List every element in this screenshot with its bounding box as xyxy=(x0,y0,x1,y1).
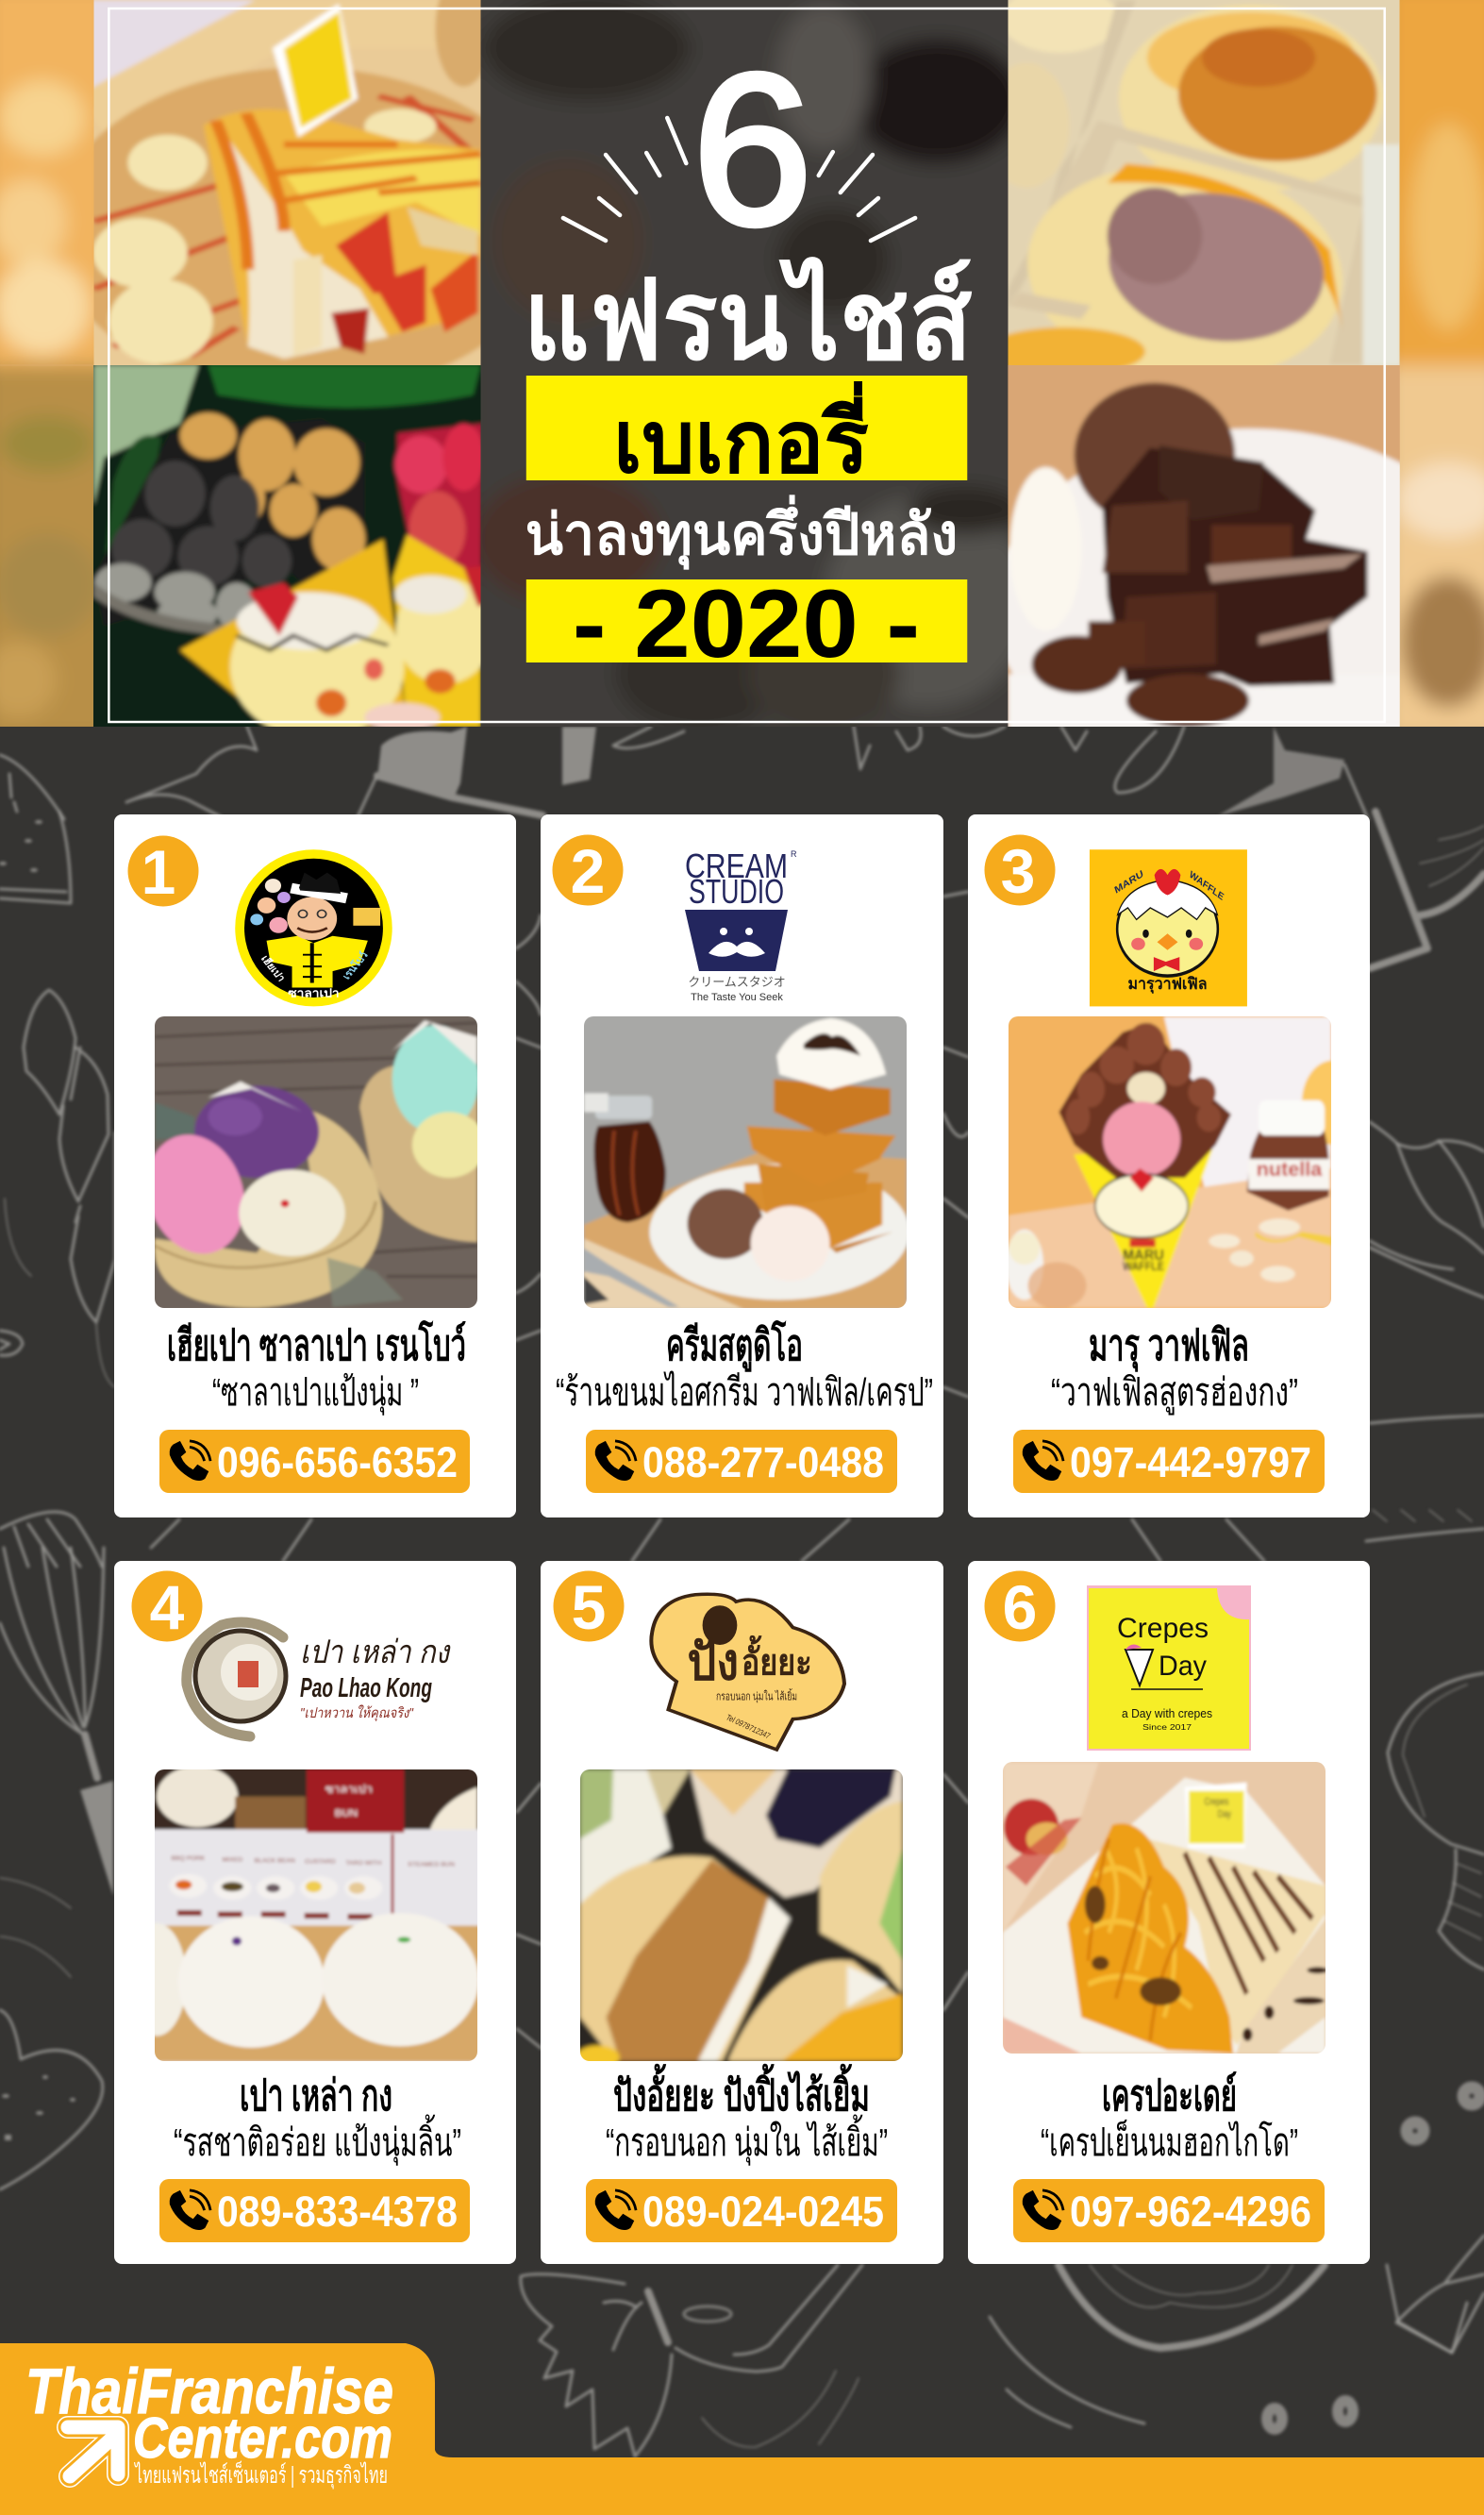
card 2 number badge: 2 xyxy=(571,836,605,906)
card 4 photo: steamed buns before menu: BLACK BEAN xyxy=(255,1858,295,1864)
footer logo wordmark line 1: ThaiFranchise xyxy=(25,2356,393,2427)
footer logo arrow icon xyxy=(68,2427,118,2476)
card 6 photo: golden thread crepe: Day xyxy=(1218,1808,1231,1820)
card 3 logo: maru waffle chick: WAFFLE xyxy=(1188,869,1226,902)
card 6 panel xyxy=(968,1561,1370,2264)
hero photo: bubble waffle with chick cone xyxy=(93,365,481,727)
hero yellow box bakery: เบเกอรี่ xyxy=(613,380,869,491)
card 6 number badge xyxy=(985,1570,1055,1642)
card 5 number badge: 5 xyxy=(572,1572,606,1642)
card 5 logo: pang ai ya bakery xyxy=(651,1594,844,1750)
card 3 photo: bubble waffle cone xyxy=(1009,1016,1331,1308)
card 5 photo: filled toast buns xyxy=(571,1764,912,2069)
background chalk sketches xyxy=(0,727,1484,2456)
card 4 photo: steamed buns before menu: TARO WITH xyxy=(345,1860,382,1867)
card 4 logo: pao lhao kong xyxy=(187,1622,451,1736)
card 2 logo: cream studio xyxy=(685,847,797,1003)
hero banner xyxy=(0,0,1484,785)
card 6 photo: golden thread crepe: Crepes xyxy=(1204,1797,1229,1808)
card 5 tagline: “กรอบนอก นุ่มใน ไส้เยิ้ม” xyxy=(606,2114,888,2166)
card 4 photo: steamed buns before menu: ซาลาเปา xyxy=(325,1784,373,1795)
card 4 phone pill xyxy=(159,2179,470,2242)
card 3 xyxy=(968,814,1370,1517)
card 5 logo: pang ai ya bakery: อั้ยยะ xyxy=(742,1635,812,1683)
card 4 photo: steamed buns before menu: STEAMED BUN xyxy=(408,1862,455,1868)
hero burst rays xyxy=(563,118,915,241)
hero white frame xyxy=(108,8,1385,722)
card 4 photo: steamed buns before menu: MIXED xyxy=(222,1857,243,1863)
hero photo: strawberry banana crepe xyxy=(94,0,481,365)
hero: left blurred side band xyxy=(0,0,94,727)
card 1 tagline: “ซาลาเปาแป้งนุ่ม ” xyxy=(212,1370,419,1416)
card 5 phone pill: 089-024-0245 xyxy=(642,2188,884,2236)
hero subheading: น่าลงทุนครึ่งปีหลัง xyxy=(525,495,958,570)
card 1 number badge: 1 xyxy=(142,837,175,907)
card 4 phone pill: 089-833-4378 xyxy=(217,2188,458,2236)
card 1 panel xyxy=(114,814,516,1517)
card 1 number badge xyxy=(128,836,198,907)
card 6 logo: crepes day: Crepes xyxy=(1117,1613,1209,1644)
card 6 logo: crepes day: Day xyxy=(1159,1651,1207,1682)
footer logo wordmark line 2: Center.com xyxy=(133,2406,392,2470)
hero heading franchise: แฟรนไชส์ xyxy=(524,257,973,383)
right column xyxy=(1370,812,1427,968)
footer orange tab xyxy=(0,2343,1484,2515)
card 3 number badge xyxy=(985,834,1055,906)
card 6 phone pill: 097-962-4296 xyxy=(1070,2188,1311,2236)
hero yellow box bakery xyxy=(526,376,967,491)
card 4 name: เปา เหล่า กง xyxy=(240,2071,392,2120)
hero: right blurred side band xyxy=(1400,0,1484,727)
card 2 logo: cream studio: クリームスタジオ xyxy=(688,975,786,989)
card 2 phone pill xyxy=(586,1430,897,1493)
card 3 logo: maru waffle chick: มารุวาฟเฟิล xyxy=(1127,975,1208,994)
card 1 logo: rainbow salapao xyxy=(235,849,392,1006)
card 5 logo: pang ai ya bakery: Tel 0978712347 xyxy=(725,1713,772,1740)
left column xyxy=(0,812,71,903)
card 3 name: มารุ วาฟเฟิล xyxy=(1089,1320,1249,1372)
card 4 photo: steamed buns before menu xyxy=(155,1769,477,2061)
hero photo: chocolate brownies xyxy=(1008,365,1400,727)
bottom band xyxy=(521,2274,672,2456)
card 6 phone pill xyxy=(1013,2179,1325,2242)
card 5 panel xyxy=(541,1561,943,2264)
card 4 logo: pao lhao kong: Pao Lhao Kong xyxy=(300,1673,432,1703)
card 2 logo: cream studio: R xyxy=(791,849,797,859)
card 5 phone pill xyxy=(586,2179,897,2242)
card 5 logo: pang ai ya bakery: กรอบนอก นุ่มใน ไส้เยิ้ม xyxy=(716,1688,797,1703)
card 2 logo: cream studio: STUDIO xyxy=(689,872,784,911)
card 6 logo: crepes day: Since 2017 xyxy=(1142,1723,1192,1732)
card 1 name: เฮียเปา ซาลาเปา เรนโบว์ xyxy=(167,1319,466,1369)
card 2 phone pill: 088-277-0488 xyxy=(642,1438,884,1486)
card 4 number badge: 4 xyxy=(150,1572,185,1642)
card 2 photo: waffle stack with ice cream xyxy=(576,1009,917,1314)
card 2 tagline: “ร้านขนมไอศกรีม วาฟเฟิล/เครป” xyxy=(556,1370,933,1414)
card 6 photo: golden thread crepe xyxy=(995,1754,1333,2059)
card 2 logo: cream studio: CREAM xyxy=(685,847,788,885)
card 5 logo: pang ai ya bakery: ปัง xyxy=(688,1634,739,1690)
card 4 tagline: “รสชาติอร่อย แป้งนุ่มลิ้น” xyxy=(174,2114,461,2166)
card 3 photo: bubble waffle cone: MARU xyxy=(1123,1246,1164,1263)
card 5 xyxy=(541,1561,943,2264)
card 4 photo: steamed buns before menu: BUN xyxy=(335,1808,358,1819)
footer Thai tagline: ไทยแฟรนไชส์เซ็นเตอร์ | รวมธุรกิจไทย xyxy=(134,2460,388,2490)
card 6 number badge: 6 xyxy=(1003,1572,1037,1642)
card 2 xyxy=(541,814,943,1517)
footer brand band xyxy=(0,2343,1484,2515)
card 3 photo: bubble waffle cone: nutella xyxy=(1257,1158,1323,1181)
card 1 logo: rainbow salapao: ซาลาเปา xyxy=(288,986,340,999)
card 2 logo: cream studio: The Taste You Seek xyxy=(691,992,783,1003)
hero: darkened centre panel xyxy=(481,0,1008,727)
card 2 number badge xyxy=(553,834,623,906)
middle gaps xyxy=(516,915,541,1340)
card 1 logo: rainbow salapao: เรนโบว์ xyxy=(340,949,371,981)
card 4 photo: steamed buns before menu: CUSTARD xyxy=(305,1859,336,1865)
card 3 phone pill xyxy=(1013,1430,1325,1493)
card 2 panel xyxy=(541,814,943,1517)
card 1 phone pill: 096-656-6352 xyxy=(217,1438,458,1486)
card 2 name: ครีมสตูดิโอ xyxy=(666,1319,803,1372)
card 3 tagline: “วาฟเฟิลสูตรฮ่องกง” xyxy=(1051,1370,1298,1416)
hero photo: filled buns in box xyxy=(1008,0,1400,365)
card 1 photo: colourful buns in steamer xyxy=(155,1016,477,1308)
card 4 panel xyxy=(114,1561,516,2264)
card 1 logo: rainbow salapao: เฮียเปา xyxy=(258,953,288,983)
hero heading number 6: 6 xyxy=(692,29,812,270)
card 5 number badge xyxy=(553,1570,625,1642)
card 6 tagline: “เครปเย็นนมฮอกไกโด” xyxy=(1041,2120,1298,2164)
card 6 logo: crepes day: a Day with crepes xyxy=(1122,1706,1212,1720)
card 6 xyxy=(968,1561,1370,2264)
card 3 logo: maru waffle chick: MARU xyxy=(1113,868,1145,896)
card 3 logo: maru waffle chick xyxy=(1090,849,1247,1006)
card 3 photo: bubble waffle cone: WAFFLE xyxy=(1123,1261,1164,1273)
card 4 logo: pao lhao kong: เปา เหล่า กง xyxy=(300,1635,451,1670)
card 6 name: เครปอะเดย์ xyxy=(1102,2071,1237,2120)
card 1 phone pill xyxy=(159,1430,470,1493)
card 3 panel xyxy=(968,814,1370,1517)
hero yellow box 2020: - 2020 - xyxy=(573,570,920,678)
card 4 xyxy=(114,1561,516,2264)
card 6 logo: crepes day xyxy=(1087,1585,1251,1751)
card 5 name: ปังอั้ยยะ ปังปิ้งไส้เยิ้ม xyxy=(613,2063,870,2120)
card 3 phone pill: 097-442-9797 xyxy=(1070,1438,1311,1486)
card 1 xyxy=(114,814,516,1517)
card 4 logo: pao lhao kong: "เปาหวาน ให้คุณจริง" xyxy=(300,1704,414,1721)
card 4 photo: steamed buns before menu: BBQ PORK xyxy=(171,1855,206,1862)
card 4 number badge xyxy=(132,1570,202,1642)
card 3 number badge: 3 xyxy=(1001,836,1035,906)
